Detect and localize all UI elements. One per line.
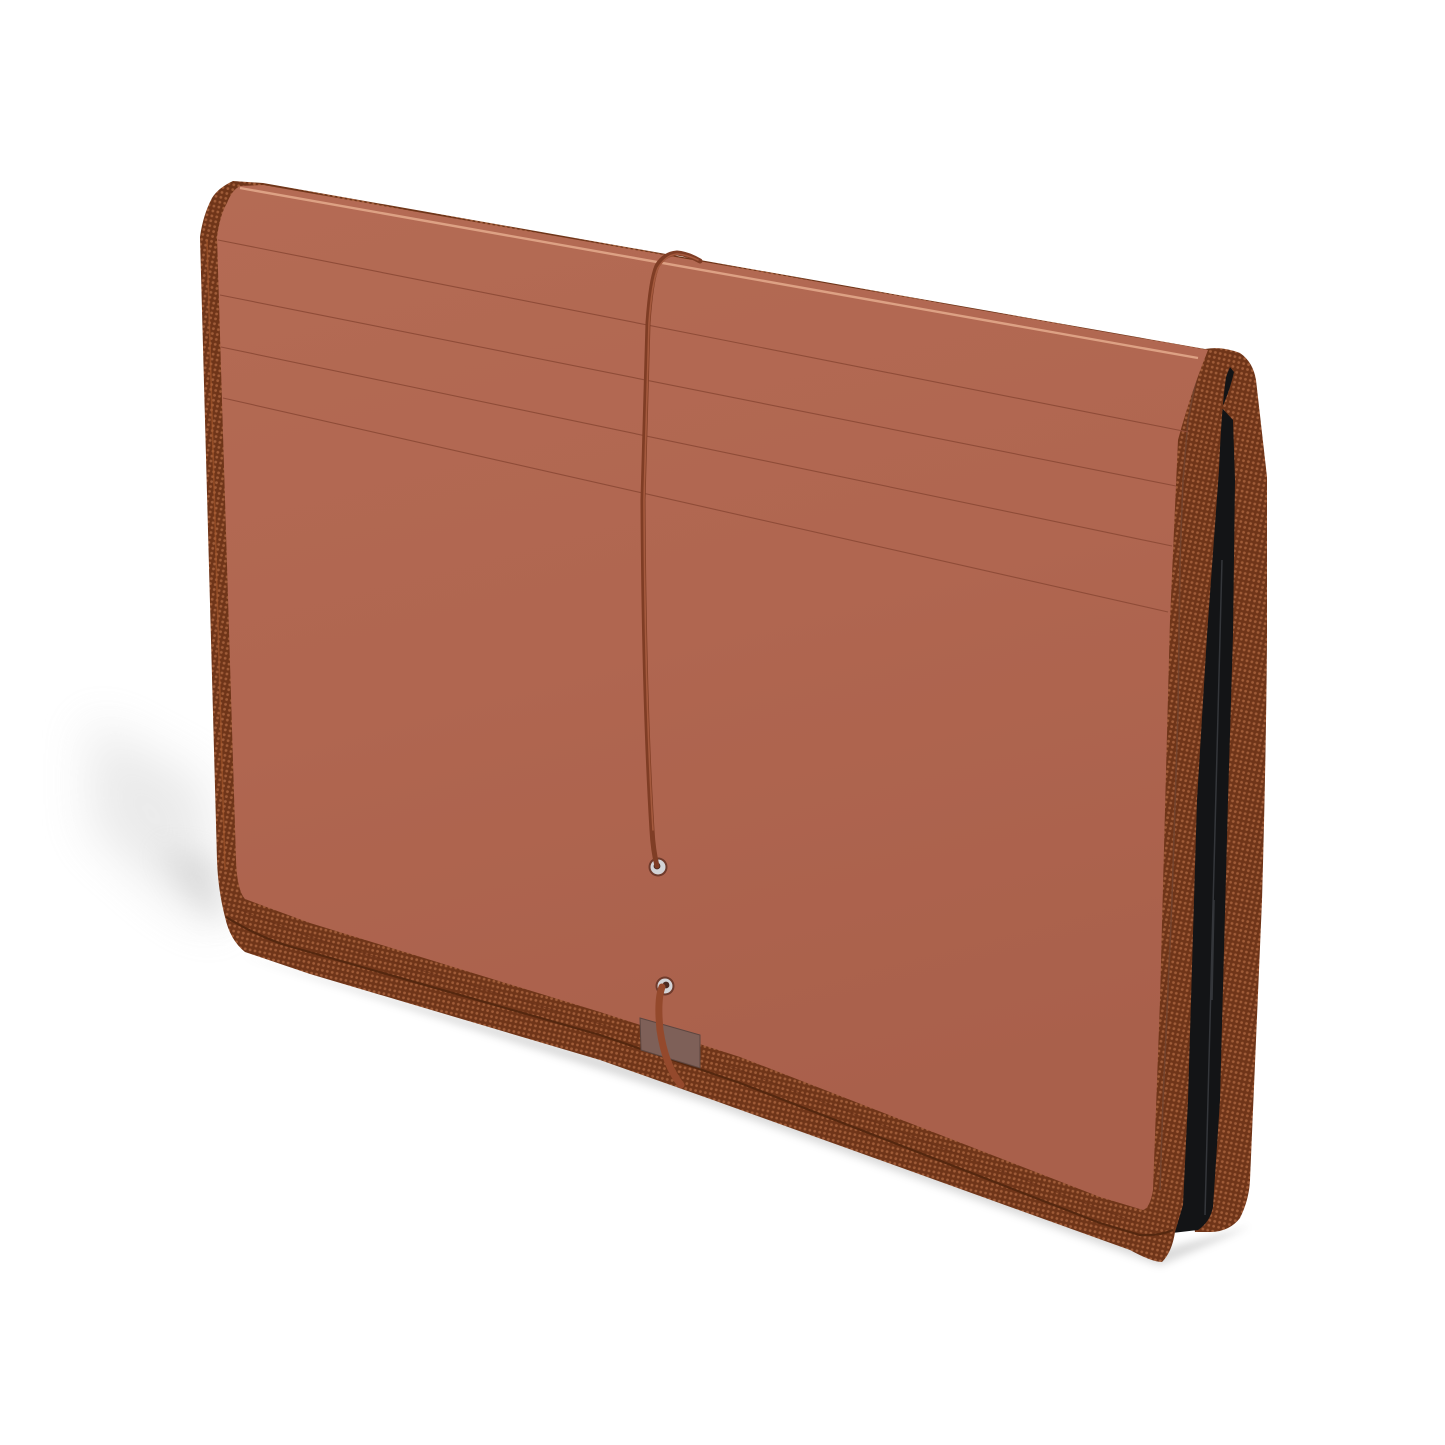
front binding: left and bottom edges xyxy=(200,181,1228,1262)
front cover panel xyxy=(217,185,1208,1210)
seams between binding layers xyxy=(226,917,1173,1235)
elastic cord: lower loop xyxy=(659,987,681,1085)
cast shadow: left side xyxy=(90,720,225,930)
pocket folds xyxy=(1205,560,1222,1215)
black inner pockets xyxy=(1172,367,1235,1233)
upper eyelet xyxy=(648,858,668,876)
embossed line 4 xyxy=(223,398,1168,612)
logo tag xyxy=(640,1018,700,1068)
lower eyelet xyxy=(656,976,674,996)
back flap binding: right edge xyxy=(1170,348,1267,1232)
embossed line 1 xyxy=(218,240,1188,432)
top edge highlight xyxy=(240,188,1198,358)
elastic cord: upper xyxy=(643,253,700,866)
embossed line 2 xyxy=(220,295,1176,486)
embossed line 3 xyxy=(221,347,1172,546)
cast shadow: under bottom edge xyxy=(240,955,1250,1266)
